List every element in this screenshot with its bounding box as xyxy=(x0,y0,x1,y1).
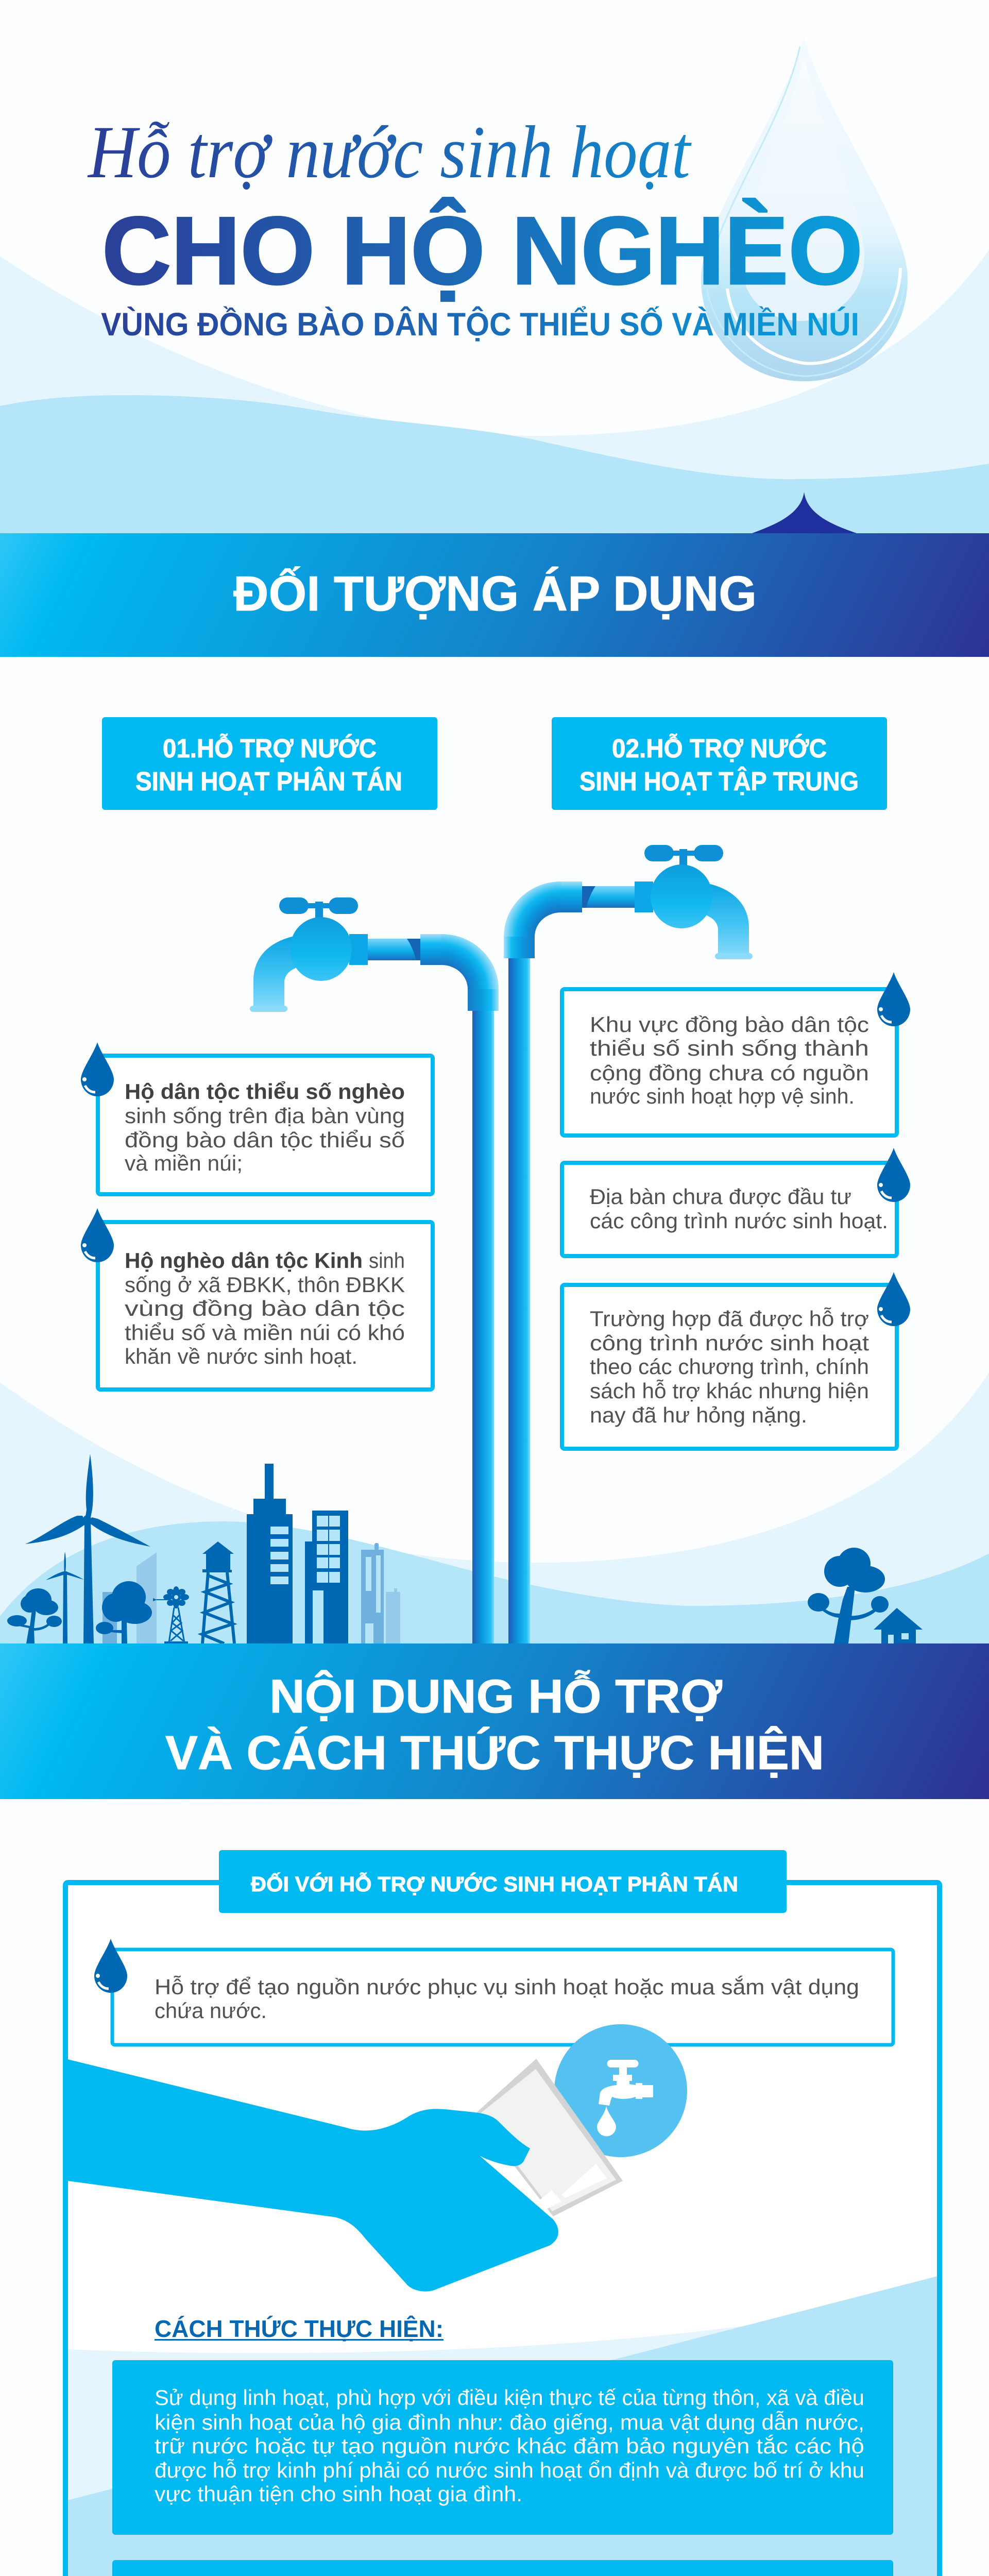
section band: đối tượng áp dụng: ĐỐI TƯỢNG ÁP DỤNG xyxy=(233,566,757,621)
method box 1: Sử dụng linh hoạt, phù hợp với điều kiện thực tế của từng thôn, xã và điều xyxy=(155,2385,864,2410)
support text box xyxy=(94,1939,893,2045)
wind pump xyxy=(153,1586,189,1643)
text box: khu vực đồng bào: Khu vực đồng bào dân tộc xyxy=(590,1012,869,1037)
subheading: VÙNG ĐỒNG BÀO DÂN TỘC THIỂU SỐ VÀ MIỀN NÚI xyxy=(101,306,859,343)
title xyxy=(87,111,863,343)
city skyline left xyxy=(7,1454,400,1643)
vertical pipe right xyxy=(508,957,530,1643)
method box 1: trữ nước hoặc tự tạo nguồn nước khác đảm bảo nguyên tắc các hộ xyxy=(155,2434,864,2458)
heading box 01: SINH HOẠT PHÂN TÁN xyxy=(135,766,402,796)
skyscraper xyxy=(247,1464,293,1643)
text box: hộ nghèo dân tộc kinh: thiểu số và miền núi có khó xyxy=(125,1320,405,1345)
method heading: CÁCH THỨC THỰC HIỆN: xyxy=(155,2315,444,2342)
support text box: chứa nước. xyxy=(155,1998,267,2023)
text box: hộ dân tộc thiểu số nghèo: đồng bào dân tộc thiểu số xyxy=(125,1128,405,1152)
text box: hộ dân tộc thiểu số nghèo: và miền núi; xyxy=(125,1151,243,1175)
panel background xyxy=(65,1883,940,2576)
text box: hộ dân tộc thiểu số nghèo: Hộ dân tộc thiểu số nghèo xyxy=(125,1079,405,1104)
text box: khu vực đồng bào xyxy=(562,972,910,1136)
text box: hộ nghèo dân tộc kinh: sinh xyxy=(369,1248,405,1273)
text box: trường hợp đã được hỗ trợ: sách hỗ trợ khác nhưng hiện xyxy=(590,1379,869,1403)
illustration: hand with card and tap xyxy=(67,2024,687,2292)
panel heading xyxy=(219,1850,787,1913)
main heading: CHO HỘ NGHÈO xyxy=(102,197,863,304)
text box: trường hợp đã được hỗ trợ xyxy=(562,1272,910,1449)
method box 1: kiện sinh hoạt của hộ gia đình như: đào giếng, mua vật dụng dẫn nước, xyxy=(155,2410,864,2434)
text box: khu vực đồng bào: thiểu số sinh sống thành xyxy=(590,1036,869,1060)
method box 1: được hỗ trợ kinh phí phải có nước sinh hoạt ổn định và được bố trí ở khu xyxy=(155,2458,864,2482)
header background waves xyxy=(0,250,989,533)
lower background waves xyxy=(0,1372,989,1643)
support text box: Hỗ trợ để tạo nguồn nước phục vụ sinh hoạt hoặc mua sắm vật dụng xyxy=(155,1975,859,1999)
heading box 01: 01.HỖ TRỢ NƯỚC xyxy=(163,733,377,763)
panel: hỗ trợ nước sinh hoạt phân tán xyxy=(65,1850,940,2576)
text box: trường hợp đã được hỗ trợ: nay đã hư hỏng nặng. xyxy=(590,1403,807,1427)
method box 2 xyxy=(112,2560,893,2576)
water tower xyxy=(202,1541,234,1643)
text box: hộ dân tộc thiểu số nghèo: sinh sống trên địa bàn vùng xyxy=(125,1104,405,1128)
text box: hộ dân tộc thiểu số nghèo xyxy=(81,1042,433,1194)
text box: khu vực đồng bào: cộng đồng chưa có nguồn xyxy=(590,1061,869,1085)
section band: nội dung hỗ trợ: VÀ CÁCH THỨC THỰC HIỆN xyxy=(165,1726,824,1780)
text box: địa bàn chưa được đầu tư: Địa bàn chưa được đầu tư xyxy=(590,1184,851,1209)
text box: hộ nghèo dân tộc kinh: sống ở xã ĐBKK, thôn ĐBKK xyxy=(125,1273,405,1297)
text box: trường hợp đã được hỗ trợ: Trường hợp đã được hỗ trợ xyxy=(590,1307,869,1331)
heading box 02: SINH HOẠT TẬP TRUNG xyxy=(579,766,859,796)
drop peak above band xyxy=(752,492,857,533)
text box: hộ nghèo dân tộc kinh: vùng đồng bào dân tộc xyxy=(125,1296,405,1320)
heading box 02 xyxy=(552,717,887,810)
wind turbine hub xyxy=(83,1515,91,1523)
faucet left xyxy=(250,897,499,1012)
text box: trường hợp đã được hỗ trợ: theo các chương trình, chính xyxy=(590,1354,869,1379)
text box: địa bàn chưa được đầu tư: các công trình nước sinh hoạt. xyxy=(590,1209,888,1233)
text box: hộ nghèo dân tộc kinh: khăn về nước sinh hoạt. xyxy=(125,1344,357,1368)
heading box 01 xyxy=(102,717,437,810)
method box 1 xyxy=(112,2360,893,2535)
wind turbine small xyxy=(46,1552,84,1643)
text box: trường hợp đã được hỗ trợ: công trình nước sinh hoạt xyxy=(590,1331,869,1355)
faded tower xyxy=(361,1543,400,1643)
text box: địa bàn chưa được đầu tư xyxy=(562,1148,910,1256)
text box: khu vực đồng bào: nước sinh hoạt hợp vệ sinh. xyxy=(590,1084,855,1108)
tree xyxy=(7,1588,62,1643)
heading box 02: 02.HỖ TRỢ NƯỚC xyxy=(612,733,827,763)
tree xyxy=(96,1581,152,1643)
text box: hộ nghèo dân tộc kinh xyxy=(81,1208,433,1389)
section band: nội dung hỗ trợ: NỘI DUNG HỖ TRỢ xyxy=(269,1670,723,1723)
vertical pipe left xyxy=(472,1010,494,1643)
wind turbine large xyxy=(25,1454,150,1643)
section band: đối tượng áp dụng xyxy=(0,533,989,657)
faucet right xyxy=(504,845,753,959)
text box: hộ nghèo dân tộc kinh: Hộ nghèo dân tộc Kinh xyxy=(125,1248,363,1273)
section band: nội dung hỗ trợ xyxy=(0,1643,989,1799)
icon: big water drop xyxy=(701,36,908,381)
method box 1: vực thuận tiện cho sinh hoạt gia đình. xyxy=(155,2482,522,2506)
script heading: Hỗ trợ nước sinh hoạt xyxy=(87,111,692,194)
panel heading: ĐỐI VỚI HỖ TRỢ NƯỚC SINH HOẠT PHÂN TÁN xyxy=(251,1872,738,1896)
tree and house right xyxy=(808,1548,923,1643)
office building xyxy=(305,1511,348,1643)
